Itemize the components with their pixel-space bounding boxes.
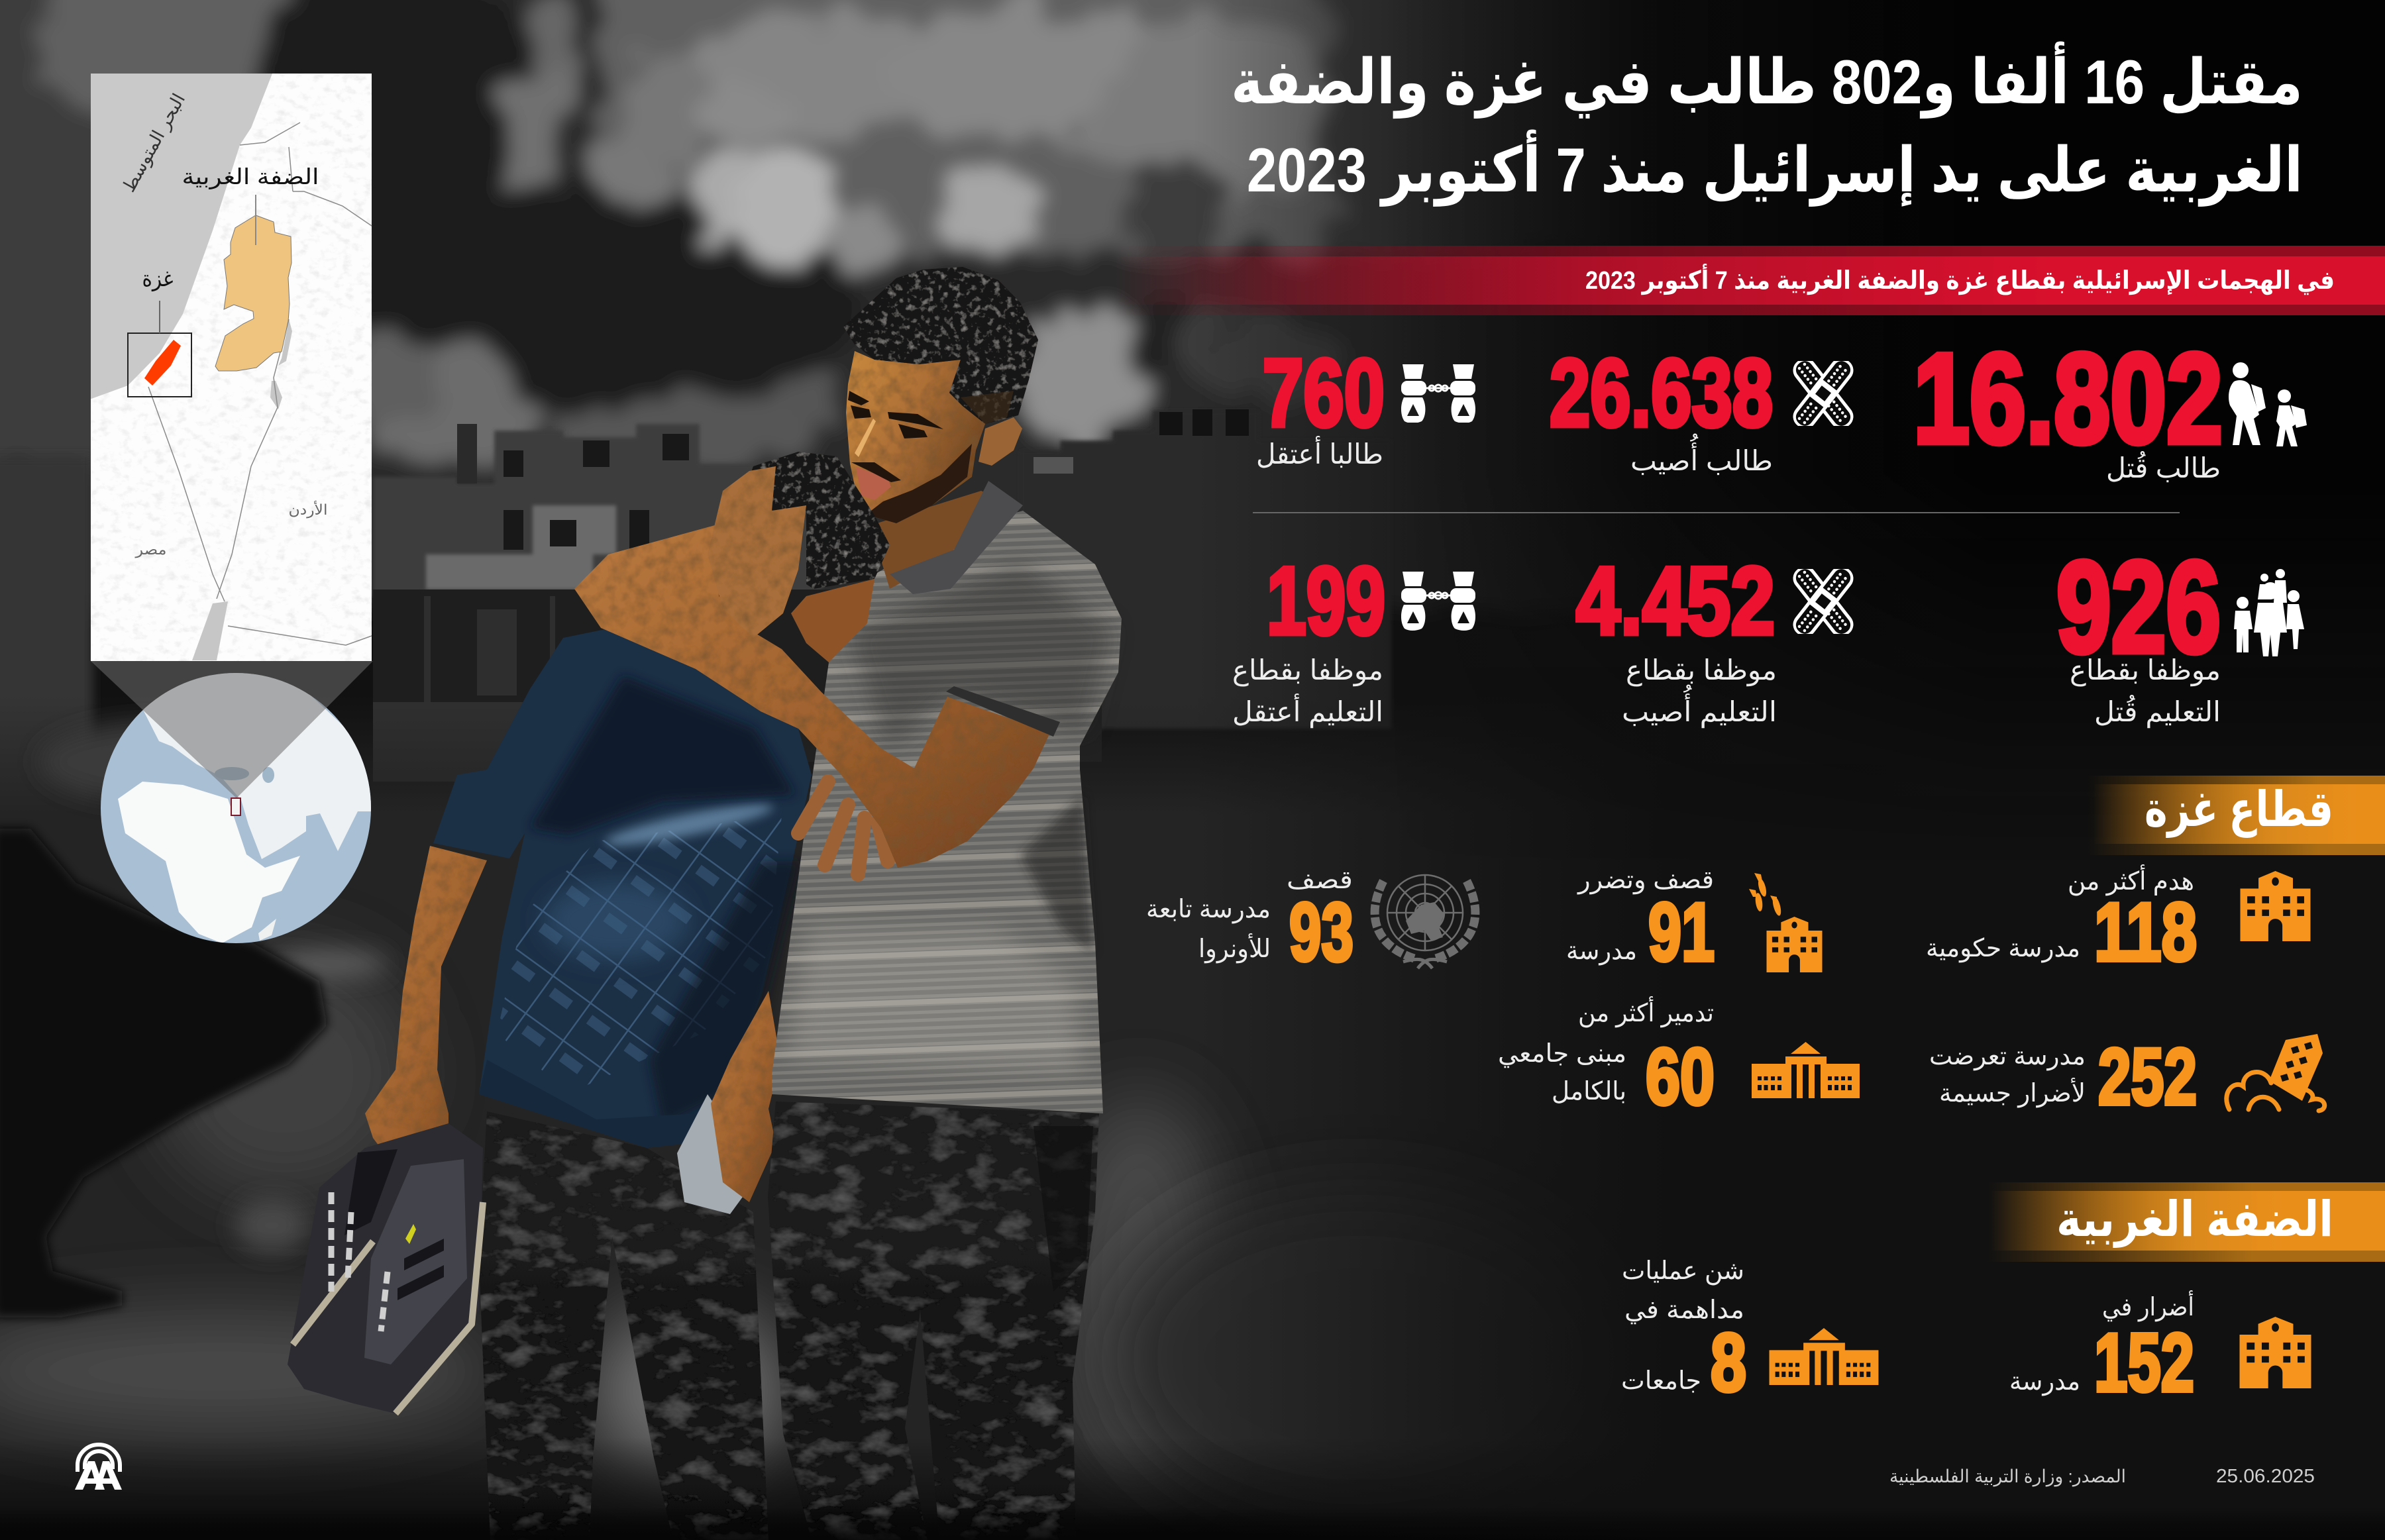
boy shirt (433, 629, 812, 1148)
label bottom (1498, 1040, 1626, 1105)
label top: شن عمليات (1622, 1257, 1744, 1286)
icon: bandage (1789, 354, 1858, 433)
man face (846, 351, 985, 523)
stat: government schools destroyed (1926, 864, 2311, 978)
borders (148, 123, 372, 645)
label top: أضرار في (2102, 1290, 2194, 1322)
globe locator (91, 661, 373, 943)
right side dark fade (1192, 0, 2385, 1540)
Gaza leader line (159, 301, 160, 333)
number: 26.638 (1550, 339, 1773, 446)
stat: staff killed (2056, 535, 2304, 729)
band text: في الهجمات الإسرائيلية بقطاع غزة والضفة الغربية منذ 7 أكتوبر 2023 (1585, 264, 2335, 295)
Gaza locator box (128, 333, 191, 397)
label top: مداهمة في (1624, 1296, 1744, 1324)
stat: university buildings destroyed (1498, 996, 1860, 1121)
number: 16.802 (1913, 327, 2223, 470)
label: Jordan: الأردن (289, 501, 327, 518)
label bottom: مدرسة تابعة (1146, 896, 1271, 923)
AA logo (75, 1445, 122, 1490)
label: Egypt: مصر (134, 541, 167, 558)
title line 1: مقتل 16 ألفا و802 طالب في غزة والضفة (1231, 42, 2303, 119)
stat: schools severely damaged (1929, 1031, 2325, 1121)
label top: هدم أكثر من (2068, 864, 2194, 896)
icon: school (2241, 871, 2311, 941)
number: 60 (1646, 1031, 1715, 1121)
boy face (791, 579, 874, 662)
stat: West Bank universities raided (1621, 1257, 1878, 1409)
man collar (890, 481, 1023, 594)
skyline buildings (0, 409, 1391, 828)
source: المصدر: وزارة التربية الفلسطينية (1889, 1466, 2126, 1487)
globe land masses (118, 673, 372, 943)
main photo: man embracing boy (288, 267, 1122, 1540)
title line 2: الغربية على يد إسرائيل منذ 7 أكتوبر 2023 (1247, 130, 2303, 207)
brows and eyes (848, 391, 943, 438)
icon: students with backpacks (2229, 362, 2307, 446)
title (1231, 42, 2303, 207)
icon: university (1752, 1042, 1860, 1098)
stat: staff detained (1232, 547, 1475, 729)
shoes (288, 1123, 483, 1413)
number: 4.452 (1576, 547, 1775, 654)
label: طالب قُتل (2106, 451, 2221, 484)
label top: تدمير أكثر من (1578, 996, 1714, 1028)
man sleeve cuff (946, 686, 1060, 737)
icon: school (2239, 1317, 2311, 1388)
icon: bandage (1789, 562, 1858, 641)
label: موظفا بقطاع (2070, 654, 2221, 686)
man hair fade (961, 391, 1014, 424)
heading text: الضفة الغربية (2056, 1192, 2333, 1248)
heading text: قطاع غزة (2145, 782, 2333, 838)
label: West Bank: الضفة الغربية (182, 164, 319, 189)
label top (1622, 1257, 1744, 1324)
divider (1253, 512, 2180, 513)
icon: handcuffs (1401, 572, 1475, 631)
man hand on boy's head (708, 466, 806, 638)
stat: UNRWA schools bombed (1146, 866, 1475, 978)
man pants (768, 1102, 1099, 1540)
icon: university (1770, 1328, 1878, 1385)
label: التعليم قُتل (2094, 695, 2221, 729)
number: 252 (2098, 1031, 2197, 1121)
number: 118 (2094, 887, 2197, 978)
boy arm with hand (365, 846, 487, 1188)
label (1232, 654, 1383, 729)
water bottle (677, 1094, 761, 1214)
West Bank leader line (255, 195, 256, 245)
label bottom: مدرسة حكومية (1926, 935, 2080, 963)
ground (0, 695, 1722, 1540)
label bottom: بالكامل (1552, 1078, 1626, 1105)
number: 91 (1648, 887, 1715, 978)
icon: family (2234, 569, 2304, 656)
label (1929, 1043, 2086, 1108)
label top: قصف (1287, 866, 1353, 894)
mustache (851, 462, 901, 482)
man arm (574, 525, 1050, 868)
West Bank (215, 215, 292, 371)
heading band: Gaza Strip (2087, 776, 2385, 855)
label (1622, 654, 1777, 729)
map inset (91, 74, 372, 661)
man fingers (798, 782, 888, 874)
red subtitle band (1113, 246, 2385, 315)
stat: students wounded (1550, 339, 1858, 476)
number: 926 (2056, 535, 2221, 680)
label: التعليم أُصيب (1622, 685, 1777, 729)
label bottom: مبنى جامعي (1498, 1040, 1626, 1068)
label: مدرسة تعرضت (1929, 1043, 2086, 1071)
label (2070, 654, 2221, 729)
zoom cone (91, 661, 373, 798)
globe ocean (101, 673, 371, 943)
icon: UN emblem (1375, 875, 1475, 968)
label: Gaza: غزة (142, 266, 174, 291)
label: طالب أُصيب (1630, 434, 1773, 476)
number: 152 (2094, 1317, 2194, 1409)
terrain relief (91, 74, 372, 661)
man hair (843, 267, 1038, 424)
sea (91, 74, 272, 399)
label bottom: جامعات (1621, 1367, 1701, 1395)
man shirt (772, 511, 1122, 1113)
number: 760 (1263, 339, 1385, 446)
date: 25.06.2025 (2216, 1466, 2315, 1487)
man neck (871, 491, 1004, 589)
number: 93 (1289, 887, 1353, 978)
boy pants (479, 1111, 768, 1540)
stat: staff wounded (1576, 547, 1858, 729)
label bottom: مدرسة (2009, 1368, 2080, 1396)
smoke clouds (0, 0, 1855, 609)
blurred seated figure (0, 829, 327, 1317)
label top: قصف وتضرر (1577, 866, 1714, 895)
Gaza (144, 340, 181, 385)
beard (866, 444, 972, 523)
land (91, 74, 372, 661)
boy hair (741, 452, 890, 589)
stat: students detained (1256, 339, 1475, 470)
lips (856, 467, 891, 500)
label: طالبا أعتقل (1256, 436, 1383, 470)
heading band: West Bank (1988, 1182, 2385, 1262)
boy second arm (711, 991, 780, 1202)
location box (231, 798, 240, 815)
man ear (979, 417, 1022, 466)
label bottom: مدرسة (1566, 937, 1637, 965)
stat: schools bombed and damaged (1566, 866, 1822, 978)
label: التعليم أعتقل (1232, 693, 1383, 729)
label: Mediterranean Sea: البحر المتوسط (119, 90, 189, 196)
stat: West Bank schools damaged (2009, 1290, 2311, 1409)
top right black fade (1708, 0, 2385, 653)
icon: collapsing building (2227, 1034, 2325, 1111)
stat: students killed (1913, 327, 2307, 484)
label bottom (1146, 896, 1271, 964)
icon: bombs over school (1749, 873, 1822, 972)
label: موظفا بقطاع (1626, 654, 1777, 686)
label: موظفا بقطاع (1232, 654, 1383, 686)
label bottom: للأونروا (1198, 933, 1271, 964)
bottom dark edge (0, 1507, 2385, 1540)
label: لأضرار جسيمة (1939, 1077, 2086, 1108)
number: 8 (1711, 1317, 1746, 1409)
number: 199 (1267, 547, 1385, 654)
icon: handcuffs (1401, 364, 1475, 423)
nose highlight (855, 419, 876, 457)
inland water (192, 319, 292, 660)
